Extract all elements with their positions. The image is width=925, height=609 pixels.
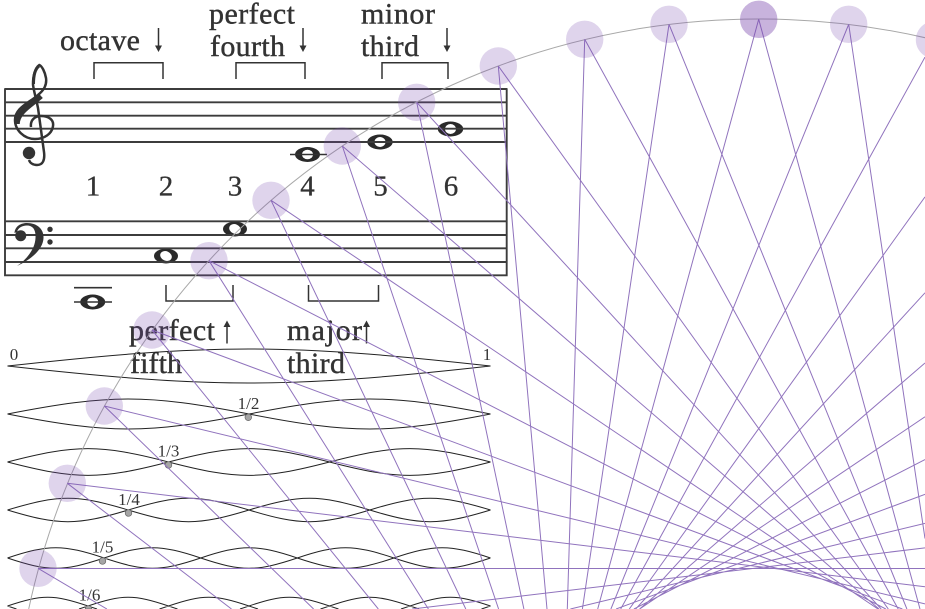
bottom interval brackets — [166, 285, 378, 301]
string fraction labels: 1/5 — [92, 538, 113, 557]
string: 6 segments — [8, 597, 490, 609]
grand staff lines — [5, 88, 507, 276]
vibrating strings — [8, 349, 490, 609]
label: perfect fourth — [209, 0, 296, 63]
string fraction labels: 1 — [483, 345, 491, 364]
label: minor third — [361, 0, 435, 63]
string fraction labels: 1/3 — [158, 442, 179, 461]
interval labels below the staff — [129, 314, 362, 380]
label: perfect fourth: fourth — [210, 30, 285, 63]
label: perfect fifth — [129, 314, 216, 380]
harmonic numbers: 4 — [300, 170, 315, 202]
icon: treble clef — [15, 65, 53, 165]
notes 1 to 6 — [80, 122, 463, 310]
harmonic numbers: 5 — [373, 170, 388, 202]
string: fundamental — [8, 349, 490, 383]
string fraction labels: 1/4 — [118, 490, 140, 509]
down arrows — [155, 28, 450, 52]
string fraction labels — [10, 345, 491, 605]
string: 2 segments — [8, 399, 490, 429]
string: 5 segments — [8, 548, 490, 568]
string fraction labels: 1/6 — [79, 586, 100, 605]
harmonic numbers: 6 — [444, 170, 458, 202]
up arrows — [224, 320, 370, 344]
ledger lines — [74, 154, 327, 302]
icon: bass clef — [14, 223, 53, 266]
harmonic numbers: 1 — [86, 170, 100, 202]
label: minor third: third — [361, 30, 419, 63]
label: perfect fifth: perfect — [129, 314, 216, 347]
top interval brackets — [94, 63, 448, 79]
interval labels above the staff — [60, 0, 435, 63]
node markers — [85, 414, 252, 609]
label: major third — [287, 314, 362, 380]
string: 3 segments — [8, 449, 490, 475]
label: octave: octave — [60, 24, 140, 57]
string fraction labels: 0 — [10, 345, 18, 364]
string: 4 segments — [8, 498, 490, 522]
harmonic numbers — [86, 170, 458, 202]
label: major third: third — [287, 347, 345, 380]
string fraction labels: 1/2 — [238, 394, 259, 413]
harmonic numbers: 2 — [159, 170, 173, 202]
harmonic numbers: 3 — [228, 170, 242, 202]
label: perfect fifth: fifth — [130, 347, 182, 380]
label: major third: major — [287, 314, 362, 347]
